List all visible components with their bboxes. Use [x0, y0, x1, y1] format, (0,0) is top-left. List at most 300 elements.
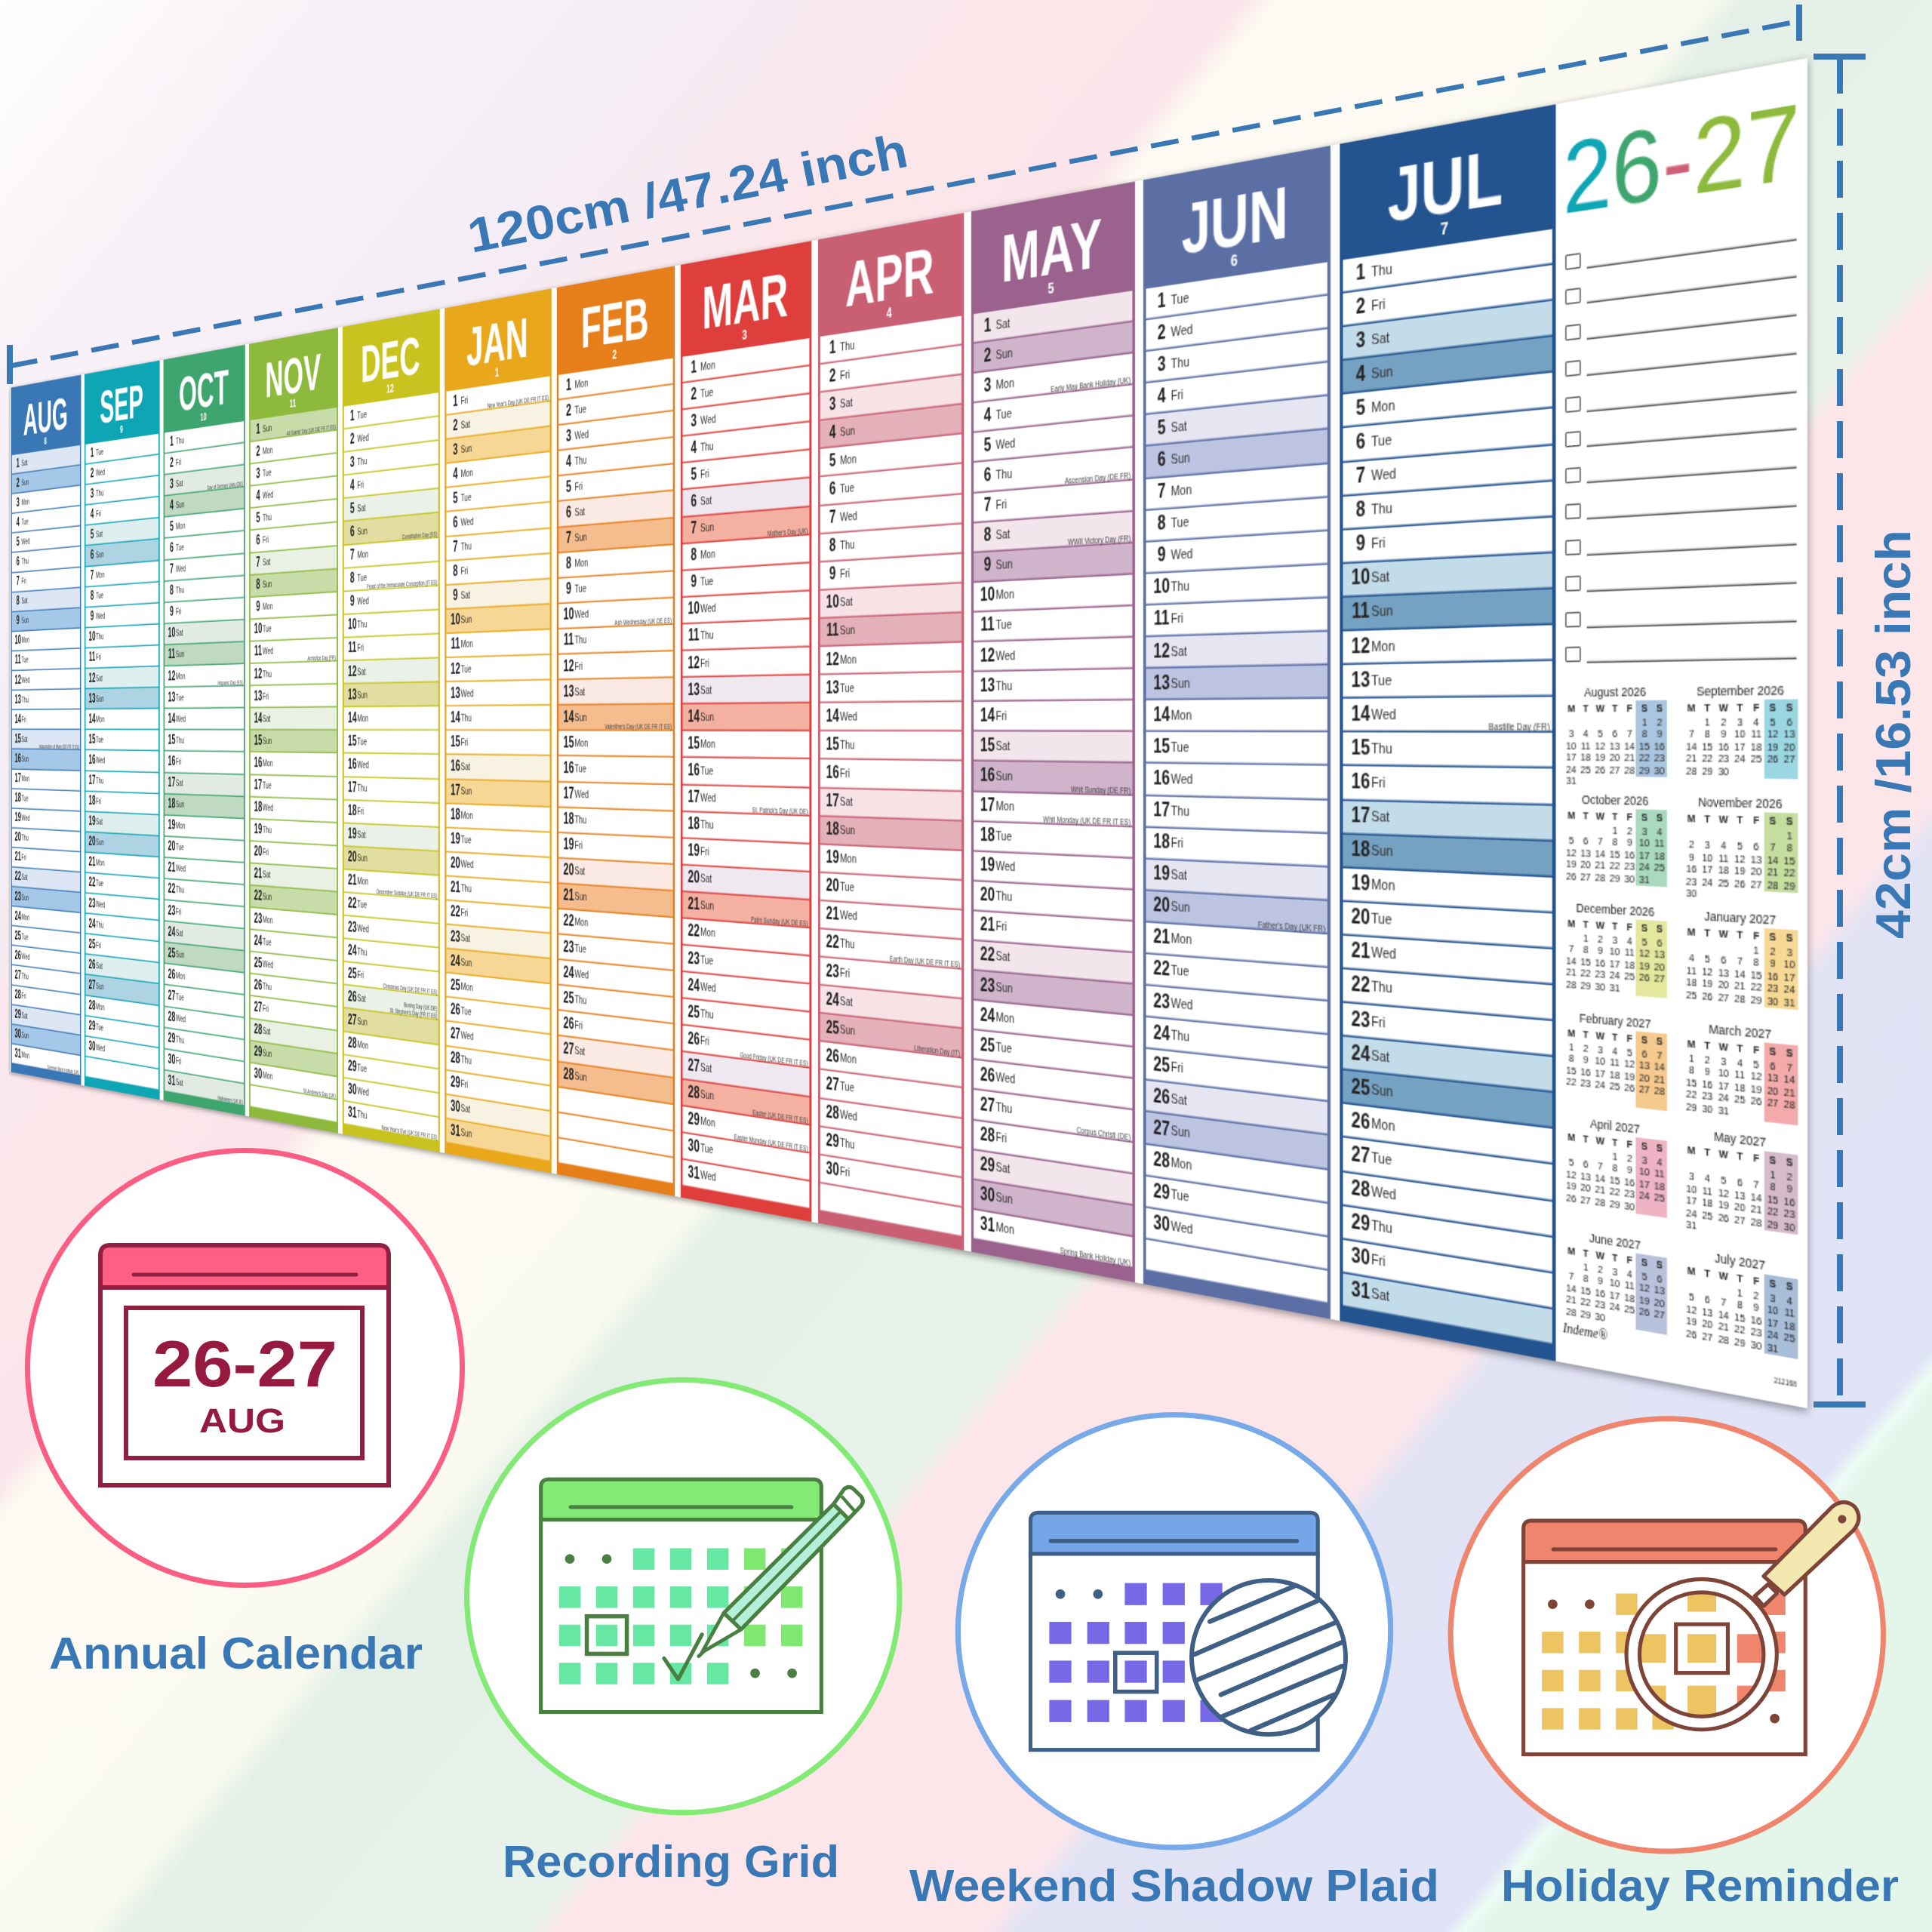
day rows: APR: 29: [826, 1131, 839, 1152]
day rows: FEB: 11: [564, 632, 574, 649]
day rows: APR: Sun: [840, 824, 855, 838]
day rows: AUG: [12, 445, 80, 1076]
day rows: FEB: 22: [564, 913, 574, 931]
day rows: JAN: 12: [451, 661, 460, 677]
day rows: NOV: Tue: [263, 780, 272, 791]
day rows: JAN: Tue: [461, 663, 472, 675]
day rows: JUL: 7: [1356, 465, 1365, 488]
mini calendar: March 2027: 5: [1753, 1057, 1759, 1072]
mini calendar: October 2026: W: [1596, 810, 1604, 823]
day rows: NOV: Sun: [263, 892, 272, 903]
day rows: AUG: 27: [15, 968, 21, 983]
day rows: DEC: Tue: [357, 737, 367, 747]
mini calendar: February 2027: 9: [1583, 1054, 1588, 1066]
day rows: DEC: 23: [348, 919, 357, 935]
mini calendar: June 2027: 14: [1566, 1281, 1577, 1295]
mini calendar: May 2027: M: [1687, 1143, 1696, 1157]
day rows: SEP: Tue: [96, 1023, 103, 1033]
day rows: JAN: Wed: [461, 1030, 474, 1043]
day rows: OCT: 14: [168, 712, 175, 726]
day rows: SEP: 4: [91, 507, 94, 521]
panel: JUN column: [1143, 146, 1331, 1319]
day rows: MAY: Wed: [995, 649, 1015, 663]
mini calendar: December 2026: 15: [1580, 955, 1591, 968]
mini calendar: November 2026: 4: [1721, 839, 1726, 853]
mini calendar: September 2026: 17: [1734, 740, 1746, 753]
day rows: MAY: Whit Monday (UK DE FR IT ES): [1043, 816, 1131, 827]
day rows: MAR: 23: [688, 949, 700, 968]
day rows: OCT: Sat: [176, 478, 183, 489]
day rows: DEC: 13: [348, 688, 357, 703]
mini calendar: December 2026: 20: [1654, 960, 1665, 974]
mini calendar: March 2027: [1686, 1022, 1798, 1126]
day rows: JUN: Wed: [1171, 547, 1193, 563]
day rows: JUL: Fri: [1371, 1253, 1386, 1271]
mini calendar: July 2027: July 2027: [1715, 1251, 1765, 1273]
mini calendar: May 2027: 3: [1689, 1170, 1694, 1183]
mini calendar: December 2026: 31: [1610, 980, 1620, 994]
day rows: MAY: 4: [984, 405, 991, 426]
mini calendar: June 2027: S: [1641, 1256, 1647, 1269]
day rows: JAN: Tue: [461, 1005, 472, 1018]
day rows: NOV: 7: [256, 555, 260, 571]
day rows: OCT: Tue: [176, 693, 184, 703]
mini calendar: August 2026: 31: [1566, 774, 1577, 787]
mini calendar: January 2027: M: [1687, 925, 1696, 939]
mini calendar: April 2027: 16: [1624, 1175, 1635, 1189]
panel: AUG column: [11, 375, 81, 1085]
day rows: SEP: 26: [89, 958, 96, 972]
mini calendar: March 2027: 19: [1751, 1082, 1761, 1097]
day rows: JAN: 3: [453, 441, 458, 458]
day rows: MAY: Tue: [995, 830, 1012, 844]
day rows: JAN: 20: [451, 856, 460, 872]
day rows: MAY: 12: [980, 646, 995, 666]
mini calendar: June 2027: 13: [1654, 1284, 1665, 1298]
day rows: APR: Thu: [840, 539, 854, 553]
day rows: OCT: Wed: [176, 714, 186, 724]
day rows: MAY: 5: [984, 435, 991, 456]
day rows: JAN: Mon: [461, 639, 473, 651]
day rows: APR: Sat: [840, 396, 853, 411]
day rows: JUL: Sun: [1371, 844, 1393, 860]
day rows: JUL: Sat: [1371, 1048, 1389, 1066]
day rows: MAY: 23: [980, 975, 995, 996]
day rows: MAR: 14: [688, 708, 700, 726]
mini calendar: July 2027: 2: [1753, 1288, 1759, 1303]
day rows: MAR: Sat: [700, 494, 712, 508]
mini calendar: December 2026: 5: [1642, 936, 1647, 949]
day rows: APR: Sun: [840, 1023, 855, 1038]
mini calendar: June 2027: 25: [1624, 1303, 1635, 1317]
day rows: JAN: Sun: [461, 443, 472, 455]
day rows: JAN: 4: [453, 466, 458, 482]
mini calendar: April 2027: 14: [1595, 1171, 1605, 1185]
day rows: MAY: Sat: [995, 1161, 1010, 1177]
heading: JUN: JUN: [1182, 171, 1288, 270]
day rows: MAR: 22: [688, 923, 700, 941]
day rows: JUL: Sat: [1371, 570, 1389, 586]
mini calendar: December 2026: 1: [1583, 932, 1588, 945]
day rows: JUN: 1: [1158, 290, 1166, 312]
day rows: JAN: Sat: [461, 761, 470, 773]
day rows: APR: Wed: [840, 1109, 857, 1124]
mini calendar: August 2026: 13: [1610, 740, 1620, 752]
mini calendar: March 2027: 24: [1718, 1091, 1729, 1105]
day rows: NOV: 12: [254, 666, 262, 681]
day rows: DEC: 17: [348, 780, 357, 795]
mini calendar: July 2027: 13: [1702, 1305, 1713, 1319]
day rows: MAY: 19: [980, 856, 995, 876]
day rows: MAY: 31: [980, 1215, 995, 1237]
day rows: NOV: Mon: [263, 1070, 272, 1082]
day rows: APR: 28: [826, 1103, 839, 1124]
day rows: MAY: Mon: [995, 376, 1014, 392]
day rows: JAN: Mon: [461, 467, 473, 480]
mini calendar: May 2027: W: [1719, 1147, 1728, 1161]
mini calendar: May 2027: 1: [1770, 1168, 1776, 1182]
day rows: DEC: 29: [348, 1059, 357, 1075]
day rows: MAY: Fri: [995, 709, 1007, 723]
day rows: MAR: Thu: [700, 819, 713, 832]
mini calendar: September 2026: 15: [1702, 740, 1713, 753]
mini calendar: October 2026: 31: [1639, 872, 1650, 885]
day rows: JUL: Sun: [1371, 605, 1393, 620]
label: Weekend Shadow Plaid: Weekend Shadow Plaid: [909, 1861, 1439, 1911]
mini calendar: October 2026: F: [1626, 811, 1632, 823]
mini calendar: March 2027: 23: [1702, 1089, 1713, 1103]
day rows: SEP: 27: [89, 978, 96, 992]
mini calendar: September 2026: 30: [1718, 764, 1729, 777]
day rows: NOV: Wed: [263, 647, 273, 657]
mini calendar: March 2027: S: [1770, 1044, 1776, 1058]
mini calendar: April 2027: 24: [1639, 1189, 1650, 1203]
mini calendar: June 2027: 4: [1627, 1267, 1632, 1281]
day rows: NOV: [251, 408, 337, 1123]
heading: APR: APR: [845, 234, 934, 321]
day rows: JAN: Fri: [461, 1078, 468, 1091]
mini calendar: March 2027: 1: [1689, 1052, 1694, 1065]
day rows: JUL: 1: [1356, 261, 1365, 285]
day rows: JUL: Fri: [1371, 536, 1386, 552]
day rows: JUL: Fri: [1371, 1014, 1386, 1031]
mini calendar: March 2027: 13: [1767, 1071, 1778, 1085]
day rows: SEP: Sat: [96, 961, 103, 971]
mini calendar: May 2027: F: [1753, 1151, 1759, 1165]
mini calendar: May 2027: 11: [1703, 1184, 1712, 1198]
day rows: OCT: 10: [168, 626, 175, 641]
mini calendar: February 2027: 13: [1639, 1059, 1650, 1072]
mini calendar: March 2027: W: [1719, 1040, 1728, 1054]
panel: NOV column: [249, 328, 338, 1133]
mini calendar: December 2026: December 2026: [1576, 901, 1654, 919]
day rows: APR: 13: [826, 678, 839, 697]
mini calendar: May 2027: 31: [1686, 1218, 1697, 1232]
day rows: APR: Fri: [840, 368, 850, 383]
day rows: SEP: 25: [89, 937, 96, 952]
day rows: FEB: Tue: [574, 583, 586, 595]
day rows: FEB: Mon: [574, 917, 588, 930]
day rows: JUL: Sat: [1371, 810, 1389, 826]
mini calendar: December 2026: 9: [1598, 945, 1603, 958]
day rows: DEC: 6: [350, 525, 355, 540]
day rows: NOV: 2: [256, 444, 260, 459]
mini calendar: October 2026: 27: [1580, 870, 1591, 883]
mini calendar: November 2026: 30: [1686, 887, 1697, 900]
mini calendar: August 2026: 14: [1624, 740, 1635, 752]
day rows: OCT: 4: [170, 498, 174, 512]
day rows: NOV: 22: [254, 889, 262, 904]
mini calendar: December 2026: M: [1567, 917, 1575, 930]
day rows: JAN: 8: [453, 564, 458, 580]
day rows: JUN: 8: [1158, 513, 1166, 535]
heading: NOV: [249, 328, 338, 420]
mini calendar: August 2026: 12: [1595, 740, 1605, 752]
day rows: MAY: Sun: [995, 980, 1013, 995]
day rows: DEC: Tue: [357, 900, 367, 911]
heading: OCT: OCT: [179, 359, 229, 422]
mini calendar: June 2027: 28: [1566, 1304, 1577, 1318]
mini calendar: February 2027: [1566, 1011, 1668, 1112]
heading: MAY: [971, 181, 1135, 315]
mini calendar: April 2027: 10: [1639, 1165, 1650, 1180]
day rows: DEC: Tue: [357, 573, 367, 584]
day rows: MAY: 18: [980, 826, 995, 846]
mini calendar: September 2026: [1686, 683, 1798, 780]
mini calendar: August 2026: 22: [1639, 752, 1650, 764]
day rows: NOV: Tue: [263, 624, 272, 635]
day rows: MAR: 6: [691, 493, 697, 511]
mini calendar: June 2027: T: [1583, 1247, 1589, 1260]
day rows: NOV: 4: [256, 488, 260, 503]
mini calendar: February 2027: T: [1583, 1028, 1589, 1041]
day rows: APR: Earth Day (UK DE FR IT ES): [890, 955, 960, 970]
day rows: MAY: Spring Bank Holiday (UK): [1060, 1247, 1131, 1268]
mini calendar: August 2026: 28: [1624, 763, 1635, 776]
day rows: FEB: Sat: [574, 506, 585, 518]
day rows: DEC: 3: [350, 454, 355, 470]
day rows: AUG: Sat: [21, 873, 28, 883]
mini calendar: April 2027: 6: [1583, 1158, 1588, 1171]
mini calendar: October 2026: 5: [1569, 835, 1574, 848]
mini calendar: January 2027: 17: [1784, 971, 1795, 984]
day rows: OCT: 26: [168, 968, 175, 982]
mini calendar: August 2026: 11: [1581, 740, 1590, 752]
day rows: SEP: Mon: [96, 571, 105, 580]
day rows: SEP: Mon: [96, 715, 105, 724]
day rows: OCT: 6: [170, 541, 174, 555]
day rows: APR: Wed: [840, 710, 857, 724]
day rows: MAY: 30: [980, 1185, 995, 1207]
day rows: MAY: 2: [984, 346, 991, 366]
day rows: OCT: 16: [168, 755, 175, 768]
mini calendar: January 2027: 1: [1753, 943, 1759, 957]
day rows: FEB: 21: [564, 888, 574, 905]
day rows: JAN: 13: [451, 685, 460, 701]
day rows: MAY: 25: [980, 1035, 995, 1057]
day rows: JAN: 11: [451, 637, 460, 653]
mini calendar: October 2026: 18: [1654, 849, 1665, 863]
day rows: AUG: Fri: [21, 577, 26, 586]
mini calendar: June 2027: M: [1567, 1244, 1575, 1258]
mini calendar: January 2027: 26: [1702, 989, 1713, 1003]
mini calendar: March 2027: 9: [1705, 1066, 1710, 1078]
day rows: MAR: Mon: [700, 549, 715, 562]
day rows: AUG: Thu: [21, 834, 29, 843]
day rows: MAR: Wed: [700, 1169, 716, 1185]
mini calendar: April 2027: 17: [1639, 1177, 1650, 1191]
day rows: FEB: Wed: [574, 609, 589, 621]
mini calendar: July 2027: 7: [1721, 1296, 1726, 1309]
day rows: MAY: Thu: [995, 1100, 1012, 1117]
mini calendar: August 2026: 27: [1610, 763, 1620, 776]
mini calendar: March 2027: 30: [1702, 1101, 1713, 1115]
day rows: APR: Mon: [840, 1051, 857, 1066]
mini calendar: August 2026: 6: [1612, 728, 1617, 740]
mini calendar: April 2027: 9: [1627, 1164, 1632, 1177]
day rows: MAR: Tue: [700, 765, 713, 778]
mini calendar: October 2026: 22: [1610, 860, 1620, 872]
mini calendar: September 2026: W: [1719, 701, 1728, 714]
day rows: AUG: 20: [15, 831, 21, 844]
day rows: DEC: Sat: [357, 829, 366, 841]
heading: DEC: [343, 309, 440, 407]
day rows: JUN: Wed: [1171, 772, 1193, 787]
mini calendar: March 2027: 14: [1784, 1073, 1795, 1088]
mini calendar: November 2026: 28: [1767, 878, 1778, 891]
day rows: MAY: Thu: [995, 890, 1012, 905]
day rows: FEB: 7: [566, 530, 571, 547]
title: 26-27: 26-27: [1563, 82, 1800, 236]
day rows: JAN: Fri: [461, 566, 468, 577]
day rows: JUL: 26: [1352, 1110, 1370, 1134]
mini calendar: February 2027: M: [1567, 1026, 1575, 1040]
day rows: APR: 25: [826, 1018, 839, 1038]
day rows: FEB: 25: [564, 989, 574, 1008]
day rows: JUN: Sun: [1171, 676, 1190, 691]
mini calendar: September 2026: 6: [1786, 715, 1792, 729]
mini calendar: July 2027: S: [1786, 1279, 1793, 1294]
day rows: DEC: December Solstice (UK DE FR IT ES): [377, 889, 437, 900]
mini calendar: February 2027: 16: [1580, 1065, 1591, 1078]
day rows: JUN: 5: [1158, 418, 1166, 439]
mini calendar: July 2027: 14: [1718, 1307, 1729, 1322]
mini calendar: December 2026: 7: [1569, 943, 1574, 955]
day rows: NOV: 20: [254, 844, 262, 860]
day rows: FEB: 5: [566, 478, 571, 496]
day rows: JUL: 3: [1356, 329, 1365, 352]
mini calendar: December 2026: 21: [1566, 966, 1577, 979]
mini calendar: June 2027: 26: [1639, 1305, 1650, 1319]
day rows: AUG: 21: [15, 851, 21, 864]
day rows: APR: Thu: [840, 938, 854, 952]
day rows: MAY: Mon: [995, 800, 1014, 814]
mini calendar: March 2027: 25: [1734, 1093, 1746, 1106]
day rows: MAY: 26: [980, 1065, 995, 1087]
day rows: JUN: 9: [1158, 546, 1166, 567]
mini calendar: April 2027: S: [1657, 1141, 1663, 1155]
day rows: MAR: 12: [688, 654, 700, 672]
day rows: JUL: Bastille Day (FR): [1489, 724, 1550, 734]
mini calendar: December 2026: W: [1596, 918, 1604, 932]
day rows: APR: Liberation Day (IT): [914, 1045, 960, 1059]
day rows: MAY: 3: [984, 376, 991, 396]
mini calendar: December 2026: T: [1612, 920, 1617, 933]
day rows: APR: 15: [826, 736, 839, 754]
day rows: APR: Wed: [840, 510, 857, 525]
day rows: DEC: Mon: [357, 549, 368, 561]
mini calendar: April 2027: 18: [1654, 1179, 1665, 1193]
mini calendar: March 2027: 26: [1751, 1094, 1761, 1109]
day rows: DEC: 11: [348, 641, 356, 656]
day rows: JUN: 15: [1153, 737, 1170, 758]
mini calendar: August 2026: 20: [1610, 752, 1620, 764]
day rows: MAR: 25: [688, 1003, 700, 1022]
mini calendar: July 2027: T: [1704, 1266, 1710, 1281]
day rows: DEC: Fri: [357, 970, 364, 981]
day rows: FEB: 2: [566, 402, 571, 420]
day rows: JAN: 14: [451, 710, 460, 726]
mini calendar: June 2027: 24: [1610, 1300, 1620, 1315]
heading: JUL: [1340, 104, 1556, 260]
panel: FEB column: [557, 266, 675, 1196]
mini calendar: March 2027: F: [1753, 1043, 1759, 1057]
mini calendar: January 2027: T: [1737, 928, 1743, 942]
mini calendar: January 2027: F: [1753, 929, 1759, 943]
day rows: MAY: Mon: [995, 1221, 1014, 1238]
day rows: SEP: 29: [89, 1019, 96, 1034]
day rows: AUG: Mon: [21, 497, 29, 507]
day rows: DEC: Sat: [357, 993, 366, 1004]
day rows: OCT: Wed: [176, 564, 186, 574]
day rows: JUN: Mon: [1171, 1155, 1192, 1174]
mini calendar: May 2027: 27: [1734, 1212, 1746, 1227]
text: width measurement: 120cm /47.24 inch: [463, 123, 912, 263]
day rows: JUL: 29: [1352, 1211, 1370, 1236]
mini calendar: June 2027: 2: [1598, 1263, 1603, 1276]
day rows: DEC: Fri: [357, 479, 364, 491]
panel: JAN column: [445, 288, 552, 1173]
day rows: FEB: 20: [564, 862, 574, 879]
day rows: MAR: Palm Sunday (UK DE ES): [751, 916, 808, 928]
day rows: JAN: 31: [451, 1123, 460, 1140]
mini calendar: September 2026: 10: [1734, 728, 1746, 741]
day rows: JUL: 30: [1352, 1245, 1370, 1271]
mini calendar: July 2027: T: [1737, 1272, 1743, 1285]
mini calendar: August 2026: 17: [1566, 751, 1577, 764]
day rows: AUG: 29: [15, 1008, 21, 1022]
mini calendar: January 2027: 10: [1784, 958, 1795, 972]
mini calendar: August 2026: 9: [1657, 728, 1662, 740]
mini calendar: November 2026: [1686, 795, 1798, 900]
mini calendar: October 2026: 25: [1654, 861, 1665, 875]
label: Recording Grid: Recording Grid: [503, 1837, 839, 1887]
day rows: MAY: Fri: [995, 498, 1007, 512]
mini calendar: February 2027: 4: [1612, 1044, 1617, 1058]
day rows: JUL: Thu: [1371, 1218, 1392, 1238]
day rows: NOV: 29: [254, 1044, 262, 1060]
day rows: DEC: Sun: [357, 853, 368, 864]
day rows: JAN: Tue: [461, 835, 472, 847]
mini calendar: September 2026: 22: [1702, 752, 1713, 765]
mini calendar: March 2027: T: [1704, 1038, 1710, 1052]
day rows: OCT: Sat: [176, 1078, 183, 1089]
day rows: NOV: Tue: [263, 937, 272, 948]
day rows: FEB: 12: [564, 658, 574, 675]
day rows: SEP: Wed: [96, 900, 105, 909]
heading: OCT: [164, 345, 245, 433]
day rows: MAY: Mon: [995, 588, 1014, 603]
